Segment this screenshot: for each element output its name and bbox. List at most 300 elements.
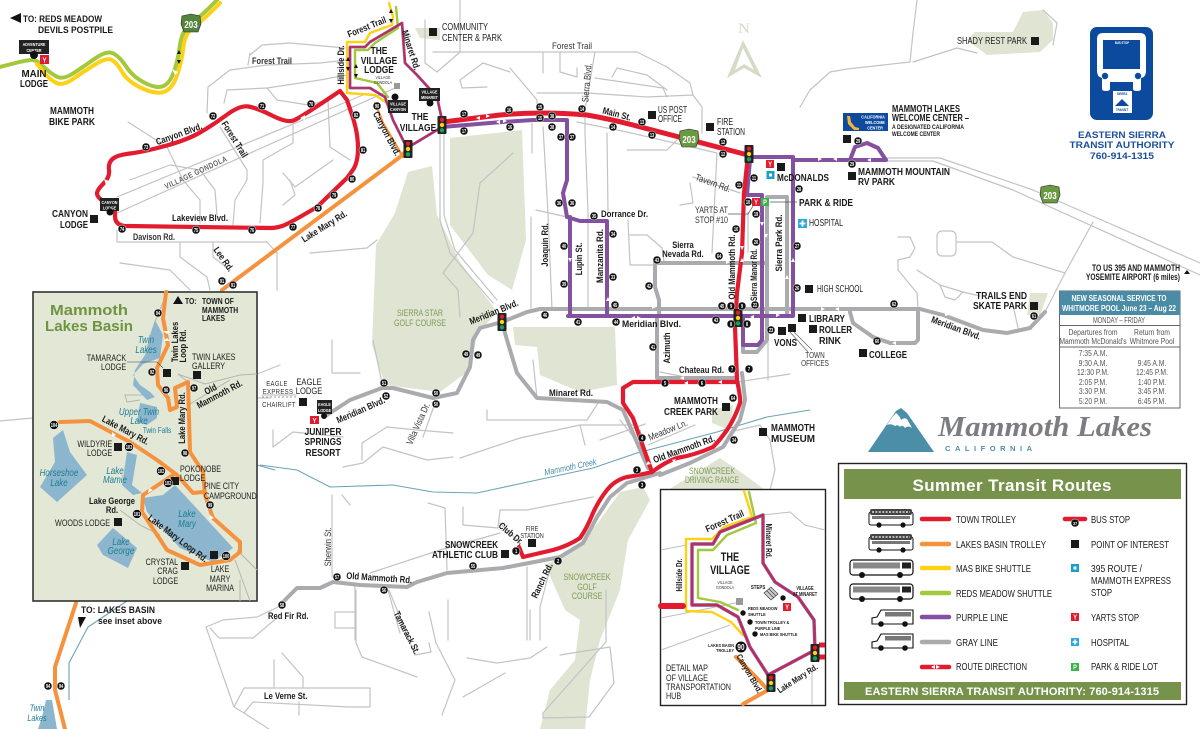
bus stop number markers: 80 [350, 177, 355, 182]
panel: Village transportation hub detail map: HUB [666, 691, 681, 701]
bus stop number markers: 43 [714, 318, 719, 323]
Eagle Lodge and Juniper Springs labels: RESORT [306, 447, 341, 459]
legend symbol names: PARK & RIDE LOT [1091, 661, 1158, 673]
bus stop number markers: 46 [543, 313, 548, 318]
road and place labels: south central: GOLF COURSE [394, 318, 446, 328]
legend route names: TOWN TROLLEY [956, 514, 1016, 526]
highway 203 shields: 203 [184, 19, 198, 30]
road labels: north central [468, 41, 785, 465]
panel: Village transportation hub detail map: Forest Trail [704, 508, 746, 534]
inset labels: LODGE [87, 448, 113, 458]
road and place labels: south central: Ranch Rd. [529, 561, 555, 600]
Trails End Skate Park and east labels: SKATE PARK [973, 300, 1027, 312]
inset labels: Mammoth Rd. [195, 377, 244, 411]
bus stop number markers: 77 [291, 225, 296, 230]
bus stop number markers: 11 [737, 183, 742, 188]
road and place labels: south central: Club Dr. [496, 520, 526, 547]
panel: Village transportation hub detail map: AT MINARET [793, 592, 817, 597]
inset POI squares [114, 369, 218, 570]
basin lakes [40, 320, 233, 568]
inset labels: LAKES [202, 313, 225, 323]
panel: Whitmore Pool seasonal schedule: 12:45 P.M. [1136, 367, 1168, 377]
labels: Post office, fire station: STATION [717, 126, 745, 138]
inset labels: Lake [106, 465, 124, 476]
Trails End Skate Park and east labels: TRAILS END [976, 290, 1027, 302]
Mammoth Bike Park label: MAMMOTH [50, 105, 94, 117]
transit authority name and phone: TRANSIT AUTHORITY [1070, 140, 1175, 151]
bus stop number markers: 15 [538, 105, 543, 110]
bus stop number markers: 3 [636, 468, 639, 473]
legend symbol names: 395 ROUTE / [1091, 563, 1142, 575]
compass north arrow: N [738, 21, 750, 37]
legend symbol names: POINT OF INTEREST [1091, 539, 1169, 551]
labels: east central landmarks: MAMMOTH MOUNTAIN [858, 166, 950, 178]
road and place labels: south central: SNOWCREEK [445, 539, 498, 551]
road and place labels: south central: MAMMOTH [771, 422, 815, 434]
bus stop number markers: 41 [651, 345, 656, 350]
parks and golf courses [372, 10, 1053, 729]
Mammoth Bike Park label: BIKE PARK [49, 116, 95, 128]
inset stop markers: 94 [156, 311, 161, 316]
road and place labels: south central: SNOWCREEK [689, 466, 735, 476]
inset stop markers: 100 [223, 554, 230, 559]
bus stop number markers: 40 [562, 244, 567, 249]
bus stop number markers: 94 [46, 684, 51, 689]
panel: Village transportation hub detail map: PURPLE LINE [755, 626, 780, 631]
basin roads [120, 290, 257, 601]
bus stop number markers: 37 [559, 135, 564, 140]
Canyon Lodge label and sign: CANYON [52, 208, 88, 220]
bus stop number markers: 34 [611, 232, 616, 237]
road and place labels: south central [264, 308, 815, 701]
Yarts at stop 10 callout: STOP #10 [695, 215, 728, 226]
panel: Village transportation hub detail map: GONDOLA [716, 585, 734, 590]
panel: Whitmore Pool seasonal schedule: 9:45 A.M. [1138, 358, 1166, 368]
inset labels: POKONOBE [180, 464, 222, 474]
panel: Village transportation hub detail map: TOWN TROLLEY & [755, 620, 789, 625]
bus stop number markers: 52 [384, 394, 389, 399]
inset labels: TWIN LAKES [192, 352, 236, 362]
highway 203 shields [181, 14, 1060, 203]
The Village label: VILLAGE [400, 122, 436, 134]
direction to US 395 and airport [1086, 263, 1190, 283]
road labels: west side: Lakeview Blvd. [172, 213, 228, 224]
Hospital icon and label [798, 217, 843, 229]
direction: to Lakes Basin: see inset above [98, 616, 162, 627]
road labels: north central: Manzanita Rd. [595, 229, 606, 283]
bus stop number markers: 39 [562, 282, 567, 287]
transit authority name and phone [1070, 130, 1175, 162]
bus stop number markers: 49 [476, 353, 481, 358]
Canyon Lodge label and sign: LODGE [60, 219, 88, 231]
bus stop number markers: 11 [752, 176, 757, 181]
highway 203 shields: 203 [682, 134, 696, 145]
panel: Whitmore Pool seasonal schedule: 5:20 P.M. [1079, 396, 1107, 406]
legend symbols: 37 [1073, 521, 1078, 526]
bus stop number markers: 91 [231, 283, 236, 288]
road and place labels: south central: Tamarack St. [391, 609, 422, 656]
bus stop number markers: 71 [260, 104, 265, 109]
bus stop number markers: 57 [335, 575, 340, 580]
panel: Village transportation hub detail map: OF VILLAGE [666, 673, 708, 683]
bus stop number markers: 20 [754, 240, 759, 245]
road labels: north central: Meadow Ln. [647, 417, 689, 443]
bus stop number markers: 6 [701, 381, 704, 386]
inset labels: Old [202, 381, 219, 397]
bus stop number markers: 94 [59, 684, 64, 689]
panel: Mammoth Lakes Basin inset map [33, 290, 257, 601]
inset labels: Twin Lakes [169, 322, 180, 362]
panel: Village transportation hub detail map: Minaret Rd. [764, 524, 774, 558]
bus stop number markers: 10 [734, 227, 739, 232]
bus stop number markers: 75 [194, 228, 199, 233]
panel: Village transportation hub detail map: TROLLEY [716, 648, 734, 653]
panel: Village transportation hub detail map: MAS BIKE SHUTTLE [760, 632, 797, 637]
California Welcome Center sign and label: CENTER [867, 125, 884, 131]
inset labels: TOWN OF [202, 296, 234, 306]
road labels: west side: Hillside Dr. [335, 45, 346, 85]
Park and Ride icons and label: Y [754, 199, 759, 207]
Park and Ride icons and label [752, 197, 853, 209]
panel: Village transportation hub detail map: STEPS [751, 585, 766, 591]
bus stop number markers: 50 [434, 402, 439, 407]
California Welcome Center sign and label: WELCOME [865, 120, 885, 125]
Mammoth Bike Park label [49, 105, 95, 128]
road labels: west side: Lake Mary Rd. [299, 208, 349, 245]
bus stop number markers: 35 [592, 214, 597, 219]
road labels: north central: Meridian Blvd. [468, 297, 520, 327]
inset labels: Horseshoe [40, 467, 78, 478]
Village Canyon and Village at Minaret signs: MINARET [421, 95, 438, 100]
legend footer band: EASTERN SIERRA TRANSIT AUTHORITY: 760-914-1315 [865, 686, 1159, 698]
detail labels: THE [721, 552, 739, 564]
inset labels: Twin Falls [143, 425, 172, 435]
road and place labels: south central: Villa Vista Dr. [404, 401, 432, 446]
road and place labels: south central: Old Mammoth Rd. [346, 571, 412, 586]
panel: Village transportation hub detail map [660, 490, 826, 706]
bus stop number markers: 61 [1032, 314, 1037, 319]
inset labels: Lake Mary Rd. [100, 413, 151, 447]
panel: Village transportation hub detail map: TRANSPORTATION [666, 682, 731, 692]
inset labels: TO: [185, 296, 197, 306]
creeks [69, 410, 810, 700]
inset labels: CRYSTAL [146, 557, 179, 567]
inset stop markers: 98 [183, 451, 188, 456]
bus stop number markers: 73 [144, 145, 149, 150]
Community Center label: CENTER & PARK [442, 32, 502, 44]
California Welcome Center sign and label: MAMMOTH LAKES [892, 103, 960, 115]
Canyon Lodge label and sign: LODGE [103, 205, 116, 211]
road labels: west side: Davison Rd. [133, 232, 175, 243]
panel: Whitmore Pool seasonal schedule: 1:40 P.M. [1138, 377, 1166, 387]
Main Lodge and Adventure Center [19, 40, 49, 90]
Mammoth Lakes California logo: Mammoth Lakes [937, 411, 1152, 443]
inset labels: WILDYRIE [77, 439, 113, 449]
California Welcome Center sign and label: WELCOME CENTER – [892, 112, 969, 124]
road labels: north central: Sierra Manor Rd. [749, 249, 760, 301]
bus stop number markers: 1 [515, 549, 518, 554]
legend symbol names: HOSPITAL [1091, 637, 1129, 649]
Canyon Lodge label and sign [52, 198, 119, 231]
inset labels: MARINA [206, 583, 235, 593]
bus stop number markers: 79 [332, 193, 337, 198]
route: MAS bike shuttle [37, 3, 393, 103]
panel: Whitmore Pool seasonal schedule: 2:05 P.M. [1079, 377, 1107, 387]
panel: Village transportation hub detail map: 90 [737, 642, 745, 652]
bus stop number markers: 42 [647, 284, 652, 289]
panel: Village transportation hub detail map: Lake Mary Rd. [775, 662, 820, 695]
Main Lodge and Adventure Center: CENTER [26, 48, 42, 53]
The Village Lodge label: THE [371, 45, 387, 57]
inset labels: Lake Mary Rd. [176, 392, 187, 444]
inset labels: George [108, 545, 134, 556]
bus stop number markers: 82 [354, 113, 359, 118]
road and place labels: south central: ATHLETIC CLUB [432, 549, 498, 561]
inset labels: PINE CITY [204, 481, 240, 491]
Mammoth Lakes California logo [868, 408, 1152, 453]
inset labels: CAMPGROUND [204, 491, 257, 501]
road and place labels: south central: Minaret Rd. [549, 388, 593, 399]
inset stop markers: 97 [192, 386, 197, 391]
bus stop number markers: 45 [720, 304, 725, 309]
Eastern Sierra Transit Authority bus stop logo: BUS STOP [1115, 41, 1129, 45]
road labels: west side: Forest Trail [219, 119, 250, 160]
bus stop number markers: 4 [641, 436, 644, 441]
labels: Post office, fire station [658, 104, 745, 138]
inset labels: Lake [130, 415, 148, 426]
inset stop markers [50, 309, 230, 560]
road labels: west side: Forest Trail [252, 56, 292, 67]
panel: Village transportation hub detail map: Hillside Dr. [674, 558, 684, 592]
road labels: north central: Sierra Blvd. [579, 63, 594, 103]
inset title: Mammoth [50, 302, 128, 319]
top left: Reds Meadow direction: DEVILS POSTPILE [38, 25, 113, 36]
road labels: north central: Sierra [672, 239, 694, 250]
panel: Whitmore Pool seasonal schedule: NEW SEASONAL SERVICE TO [1072, 294, 1166, 303]
lower Twin Lakes: Twin [30, 703, 45, 713]
Eagle Lodge and Juniper Springs labels [262, 376, 342, 459]
The Village Lodge label: LODGE [364, 64, 394, 76]
bus stop number markers: 8 [730, 322, 733, 327]
Yarts at stop 10 callout [695, 205, 753, 226]
Main Lodge and Adventure Center: LODGE [20, 78, 48, 90]
bus stop number markers: 17 [462, 129, 467, 134]
bus stop number markers: 36 [557, 201, 562, 206]
Mammoth Lakes California logo: CALIFORNIA [945, 444, 1033, 453]
legend route names [956, 514, 1052, 673]
Village Canyon and Village at Minaret signs: VILLAGE [390, 101, 406, 107]
road labels: west side: Lee Rd. [211, 245, 236, 274]
bus stop number markers: 50 [434, 391, 439, 396]
inset labels: LODGE [101, 362, 127, 372]
route direction sample [931, 665, 940, 669]
Eagle Lodge and Juniper Springs labels: SPRINGS [304, 436, 342, 448]
McDonalds with Yarts and 395 stop icons: Y [768, 161, 773, 169]
bus stop number markers: 78 [316, 206, 321, 211]
legend symbols: Y [1073, 614, 1078, 622]
panel: Village transportation hub detail map: SHUTTLE [748, 612, 766, 617]
inset stop markers: 96 [164, 388, 169, 393]
road labels: north central: Old Mammoth Rd. [651, 433, 716, 465]
bus stop number markers: 28 [797, 187, 802, 192]
road labels: north central: Joaquin Rd. [539, 223, 550, 267]
legend heading band: Summer Transit Routes [912, 476, 1112, 495]
panel: Village transportation hub detail map: Y [785, 604, 790, 612]
bus stop number markers: 64 [717, 254, 722, 259]
labels: Post office, fire station: FIRE [717, 116, 733, 128]
bus stop number markers: 55 [471, 564, 476, 569]
bus stop number markers: 45 [613, 303, 618, 308]
inset labels: Mamie [103, 474, 127, 485]
bus stop number markers: 29 [856, 139, 861, 144]
Hospital icon and label: HOSPITAL [809, 217, 843, 229]
road labels: north central: Meridian Blvd. [622, 319, 681, 330]
bus stop number markers: 5 [664, 381, 667, 386]
road labels: west side: Canyon Blvd. [154, 120, 204, 147]
road and place labels: south central: FIRE [526, 525, 538, 533]
route: purple line [350, 23, 886, 345]
inset labels: CRAG [157, 566, 178, 576]
bus stop number markers: 81 [361, 148, 366, 153]
McDonalds with Yarts and 395 stop icons: McDONALDS [777, 172, 829, 184]
road and place labels: south central: CREEK PARK [664, 406, 718, 418]
Eagle Lodge and Juniper Springs labels: EXPRESS [263, 388, 293, 396]
road labels: north central: Lupin St. [573, 243, 584, 275]
inset labels: WOODS LODGE [55, 518, 111, 528]
inset labels: Lake [112, 536, 130, 547]
inset stop markers: 102 [165, 481, 172, 486]
panel: Whitmore Pool seasonal schedule: Departures from [1068, 327, 1118, 337]
bus stop number markers: 23 [769, 328, 774, 333]
The Village Lodge label: GONDOLA [374, 80, 392, 85]
legend route names: REDS MEADOW SHUTTLE [956, 588, 1052, 600]
panel: Village transportation hub detail map: REDS MEADOW [748, 606, 778, 611]
inset title: Lakes Basin [45, 318, 133, 335]
Village Canyon and Village at Minaret signs: CANYON [390, 107, 406, 112]
road and place labels: south central: STATION [520, 532, 544, 540]
Eastern Sierra Transit Authority bus stop logo: TRANSIT [1116, 108, 1128, 112]
Eastern Sierra Transit Authority bus stop logo [1090, 27, 1153, 120]
route: lakes basin trolley [55, 103, 408, 729]
bus stop number markers: 43 [655, 258, 660, 263]
Canyon Lodge label and sign: CANYON [102, 200, 117, 205]
bus stop number markers: 13 [650, 133, 655, 138]
inset labels: LAKE [211, 564, 230, 574]
Eagle Lodge and Juniper Springs labels: CHAIRLIFT [262, 401, 296, 409]
bus stop number markers: 14 [580, 107, 585, 112]
legend symbol names: BUS STOP [1091, 514, 1130, 526]
The Village Lodge label: VILLAGE [361, 55, 397, 67]
panel: Summer Transit Routes legend [838, 464, 1186, 704]
inset labels: Twin [138, 334, 154, 345]
Park and Ride icons and label: PARK & RIDE [799, 197, 853, 209]
legend route names: GRAY LINE [956, 637, 998, 649]
road and place labels: south central: Sherwin St. [322, 528, 333, 566]
panel: Village transportation hub detail map: LAKES BASIN [708, 643, 734, 648]
legend symbol names: YARTS STOP [1091, 612, 1139, 624]
road labels: north central: Chateau Rd. [679, 365, 724, 376]
labels: Post office, fire station: OFFICE [658, 113, 682, 125]
bus stop number markers: 15 [538, 116, 543, 121]
detail shuttle routes [698, 492, 756, 610]
legend symbol names: STOP [1091, 587, 1112, 599]
California Welcome Center sign and label: CALIFORNIA [861, 114, 886, 120]
legend heading band [844, 469, 1181, 499]
bus stop number markers: 7 [731, 367, 734, 372]
McDonalds with Yarts and 395 stop icons [766, 160, 829, 184]
route: Reds Meadow shuttle to Main Lodge [0, 0, 398, 97]
Yarts at stop 10 callout: YARTS AT [695, 205, 728, 216]
bus stop number markers: 72 [211, 114, 216, 119]
road labels: north central: Nevada Rd. [662, 248, 704, 259]
panel: Whitmore Pool seasonal schedule: 6:45 P.M. [1138, 396, 1166, 406]
Trails End Skate Park and east labels [930, 290, 1027, 342]
road labels: north central: Tavern Rd. [694, 171, 732, 194]
labels: east central landmarks: TOWN [805, 350, 825, 360]
panel: Village transportation hub detail map: VILLAGE [710, 565, 750, 577]
The Village Lodge label [361, 45, 400, 89]
bus stop number markers: 10 [746, 200, 751, 205]
California Welcome Center sign and label: WELCOME CENTER [892, 131, 940, 138]
bus stop number markers: 70 [309, 102, 314, 107]
labels: east central landmarks: OFFICES [801, 358, 829, 368]
panel: Whitmore Pool seasonal schedule: Mammoth McDonald's [1059, 336, 1127, 346]
road labels: north central: Forest Trail [552, 41, 592, 52]
road labels: west side: Minaret Rd. [400, 29, 423, 71]
transit authority name and phone: EASTERN SIERRA [1078, 130, 1166, 141]
road labels: north central: Sierra Park Rd. [774, 214, 785, 272]
road and place labels: south central: MAMMOTH [674, 395, 718, 407]
road and place labels: south central: SIERRA STAR [397, 308, 443, 318]
road labels: west side [133, 14, 423, 274]
road labels: west side: Canyon Blvd. [371, 109, 403, 157]
compass north arrow [727, 21, 762, 78]
road labels: west side: Forest Trail [346, 14, 388, 40]
Main Lodge and Adventure Center: MAIN [22, 68, 46, 80]
panel: Village transportation hub detail map: VILLAGE [796, 586, 814, 591]
bus stop number markers: 90 [375, 104, 380, 109]
road and place labels: south central: GOLF [577, 582, 597, 592]
labels: east central landmarks: RV PARK [858, 176, 895, 188]
inset labels: Lake George [89, 495, 135, 506]
bus stop number markers: 64 [731, 396, 736, 401]
transit authority name and phone: 760-914-1315 [1090, 151, 1155, 162]
labels: east central landmarks: RINK [819, 335, 841, 347]
Eagle Lodge and Juniper Springs labels: JUNIPER [304, 426, 342, 438]
The Village label [400, 111, 436, 134]
inset labels [40, 296, 257, 593]
road and place labels: south central: COURSE [572, 591, 603, 601]
bus stop number markers: 74 [120, 227, 125, 232]
road and place labels: south central: Mammoth Creek [543, 457, 598, 478]
bus stop number markers: 58 [280, 603, 285, 608]
road and place labels: south central: MUSEUM [771, 433, 815, 445]
The Village Lodge label: VILLAGE [376, 75, 391, 80]
Community Center label: COMMUNITY [442, 21, 488, 33]
bus stop number markers: 34 [732, 438, 737, 443]
bus stop number markers: 91 [220, 279, 225, 284]
labels: east central landmarks: VONS [774, 337, 797, 349]
panel: Village transportation hub detail map: DETAIL MAP [666, 663, 708, 673]
bus stop number markers: 12 [721, 152, 726, 157]
bus stop number markers: 22 [753, 303, 758, 308]
bus stop number markers: 9 [730, 304, 733, 309]
panel: Village transportation hub detail map: VILLAGE [718, 580, 733, 585]
Eagle Lodge and Juniper Springs labels: LODGE [318, 408, 331, 413]
bus stop number markers: 62 [892, 302, 897, 307]
labels: east central landmarks: LIBRARY [809, 313, 845, 325]
road and place labels: south central: Red Fir Rd. [268, 610, 309, 621]
